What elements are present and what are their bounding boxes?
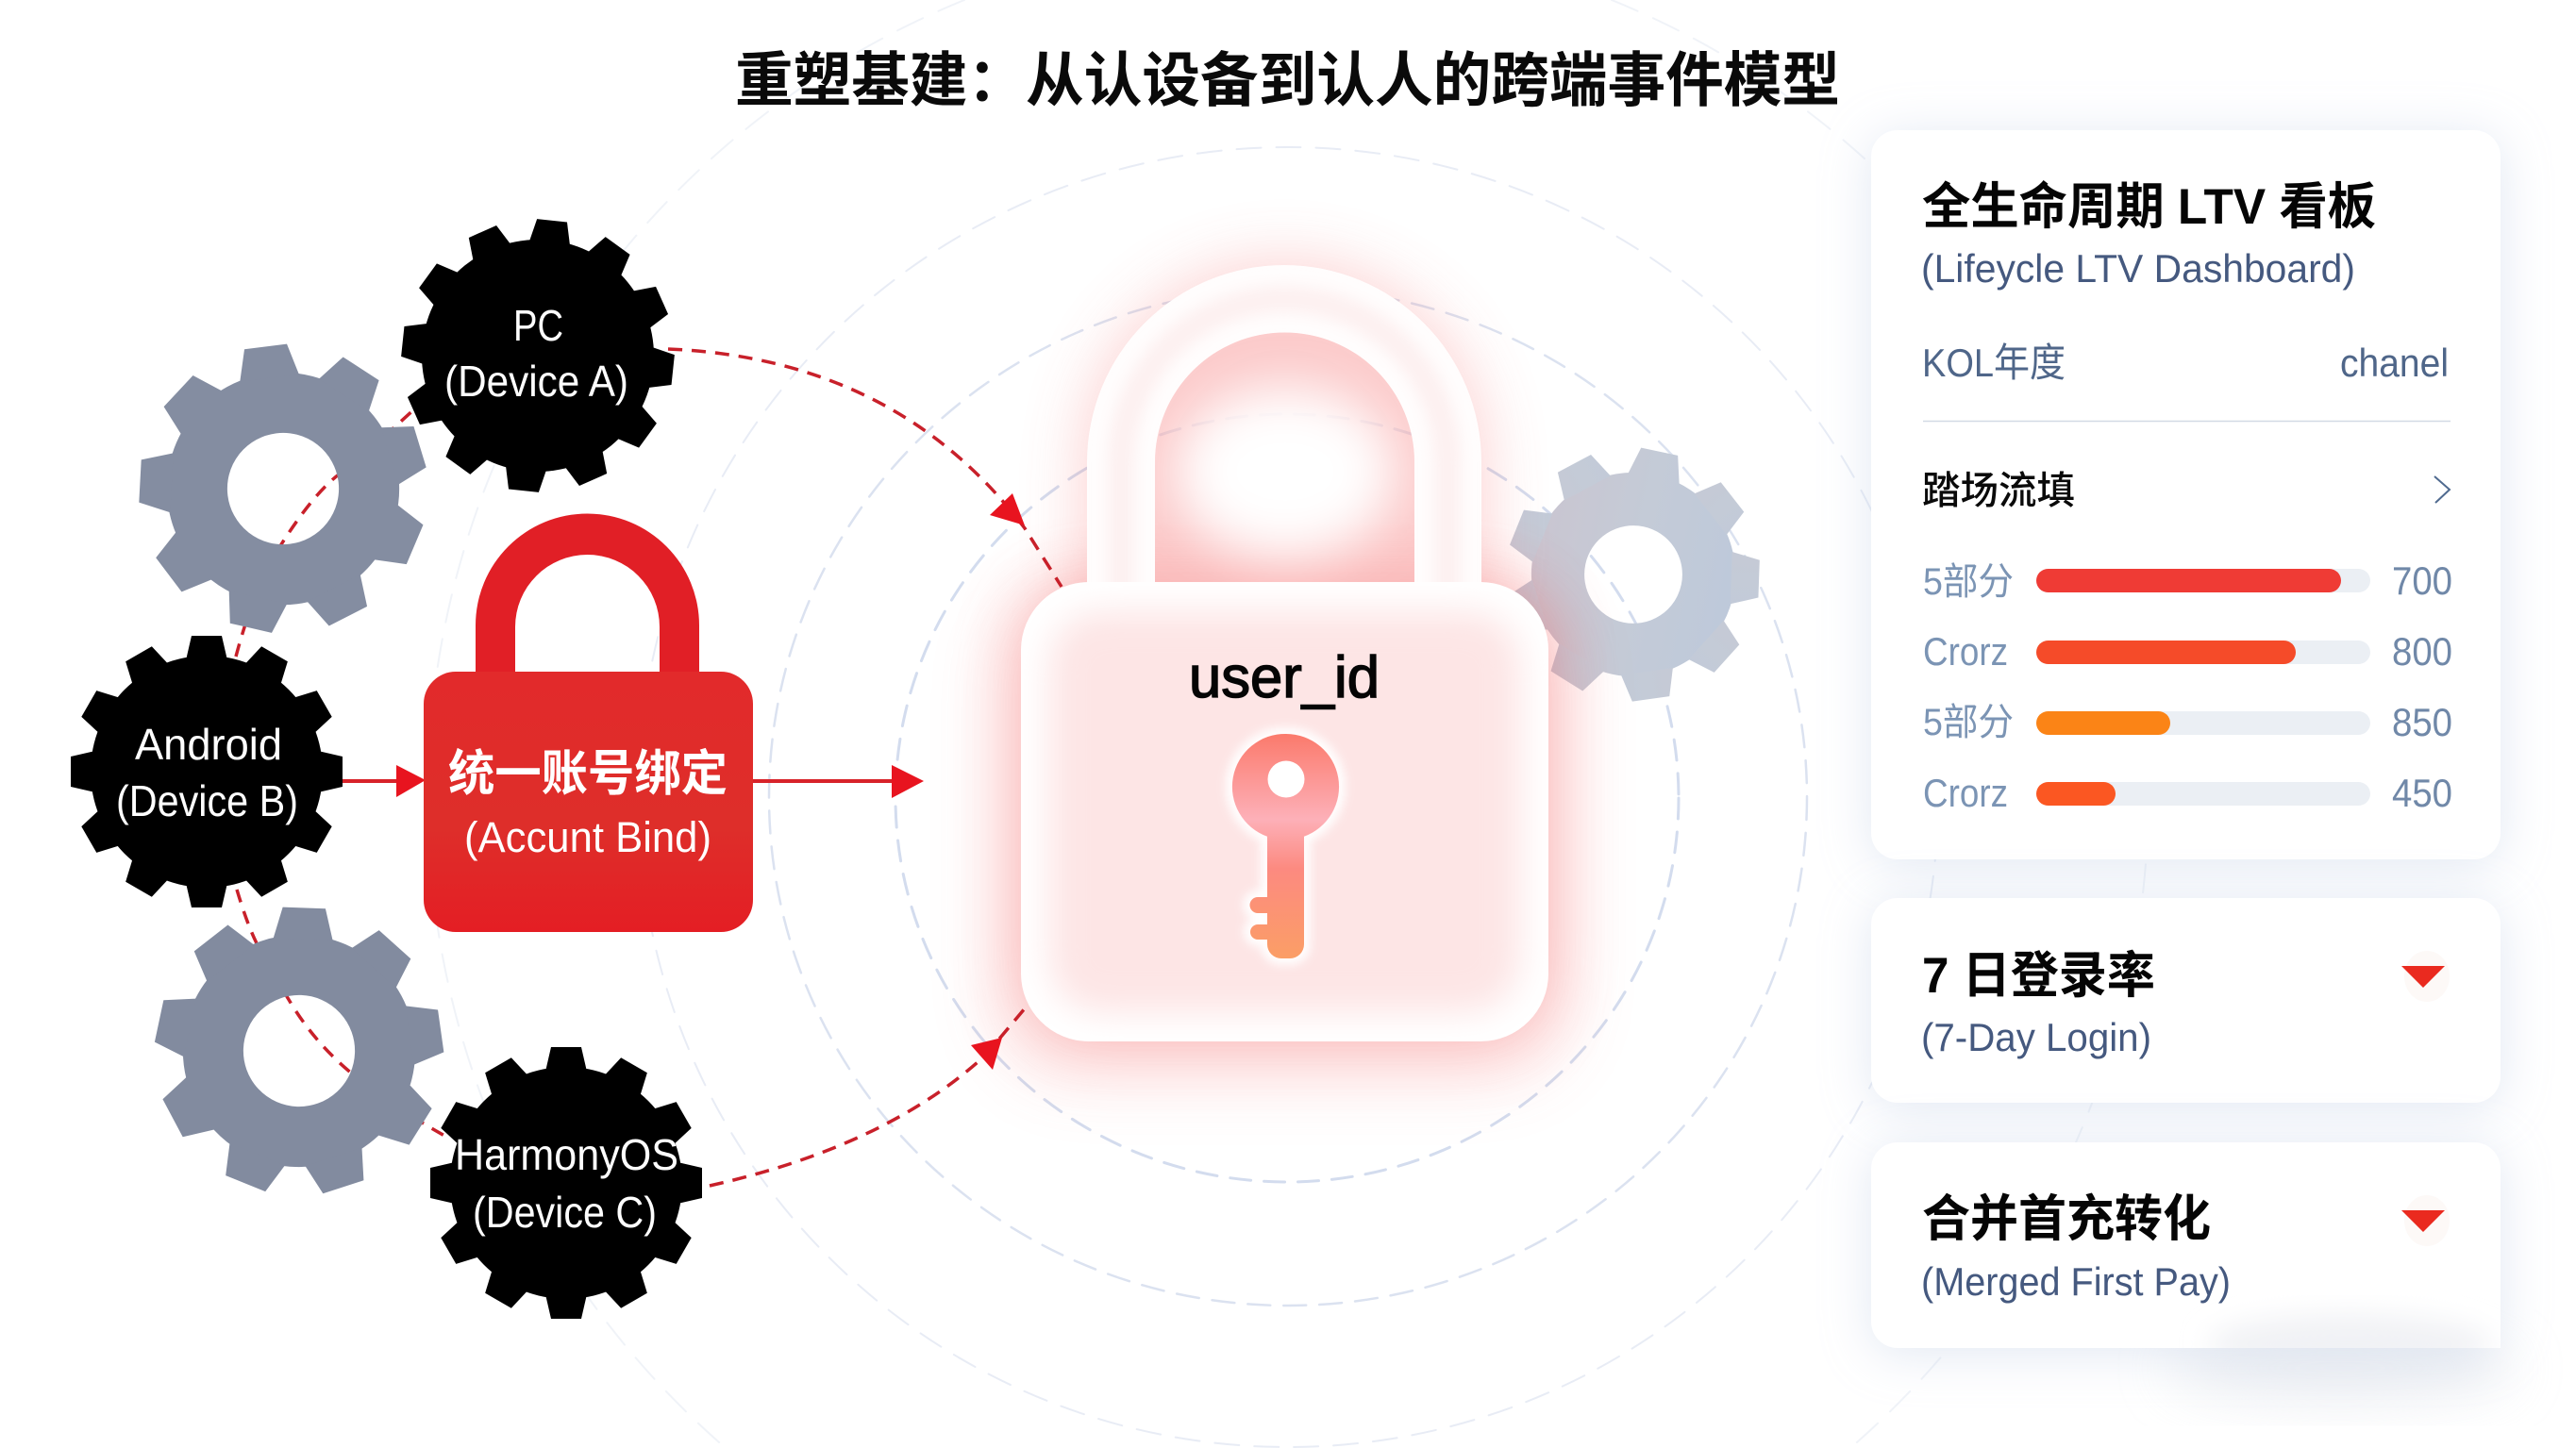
filter value: chanel — [2340, 341, 2449, 385]
icon: grey gear lower left — [148, 903, 450, 1201]
device gear: PC — [389, 207, 687, 505]
bar row 4: Crorz — [1923, 771, 2008, 815]
icon: down triangle — [2401, 1195, 2450, 1246]
section heading: 踏场流填 — [1922, 469, 2075, 512]
bar row 3: 850 — [2392, 700, 2452, 744]
device gear: HarmonyOS: HarmonyOS — [455, 1130, 678, 1179]
device gear: Android — [71, 636, 343, 907]
bar row 4 — [1923, 771, 2452, 815]
shackle — [1087, 265, 1481, 604]
icon: pale gear right — [1481, 424, 1785, 725]
bar row 1: 700 — [2392, 558, 2452, 603]
icon: grey gear upper left — [121, 329, 445, 650]
device gear: HarmonyOS: (Device C) — [473, 1188, 657, 1237]
red padlock: account bind: 统一账号绑定 — [448, 747, 728, 802]
panel: LTV dashboard — [1871, 130, 2501, 859]
bar row 4: 450 — [2392, 771, 2452, 815]
subheading: (Merged First Pay) — [1921, 1259, 2231, 1304]
title: 重塑基建：从认设备到认人的跨端事件模型 — [735, 48, 1840, 114]
arrow: account bind to user_id — [751, 765, 924, 798]
red padlock: account bind — [424, 513, 753, 932]
panel: 7-day login — [1871, 898, 2501, 1103]
heading: 全生命周期 LTV 看板 — [1922, 179, 2376, 235]
red padlock: account bind: (Accunt Bind) — [464, 813, 711, 861]
device gear: Android: Android — [135, 720, 282, 769]
bar row 1 — [1923, 558, 2452, 603]
heading: 合并首充转化 — [1922, 1191, 2211, 1247]
arrow: PC to user_id — [668, 349, 1062, 587]
bar row 2: Crorz — [1923, 629, 2008, 674]
icon: down triangle — [2401, 951, 2450, 1002]
subheading: (7-Day Login) — [1921, 1015, 2151, 1059]
shackle opening — [1158, 366, 1413, 582]
panel: merged first pay — [1871, 1142, 2501, 1374]
soft haze below cards — [2166, 1336, 2515, 1400]
lock body — [1021, 582, 1548, 1041]
label: user_id: user_id — [1189, 645, 1380, 710]
device gear: PC: (Device A) — [444, 357, 628, 406]
bar row 3: 5部分 — [1923, 702, 2014, 743]
bar row 2 — [1923, 629, 2452, 674]
bar row 2: 800 — [2392, 629, 2452, 674]
device gear: HarmonyOS — [430, 1047, 702, 1319]
filter label: KOL年度 — [1922, 341, 2066, 385]
bar row 3 — [1923, 700, 2452, 744]
subheading: (Lifeycle LTV Dashboard) — [1921, 246, 2355, 291]
heading: 7 日登录率 — [1922, 948, 2155, 1004]
central padlock — [1021, 265, 1548, 1041]
icon: key — [1232, 734, 1339, 958]
arrow: Android to account bind — [340, 765, 426, 797]
bar row 1: 5部分 — [1923, 561, 2014, 603]
arrow: HarmonyOS to user_id — [710, 1002, 1030, 1186]
concentric dashed rings — [427, 0, 2149, 1448]
device gear: PC: PC — [513, 301, 563, 350]
device gear: Android: (Device B) — [116, 776, 298, 825]
connectors behind grey gears — [236, 408, 446, 1137]
icon: chevron — [2434, 476, 2450, 503]
lock glow — [991, 265, 1576, 1085]
